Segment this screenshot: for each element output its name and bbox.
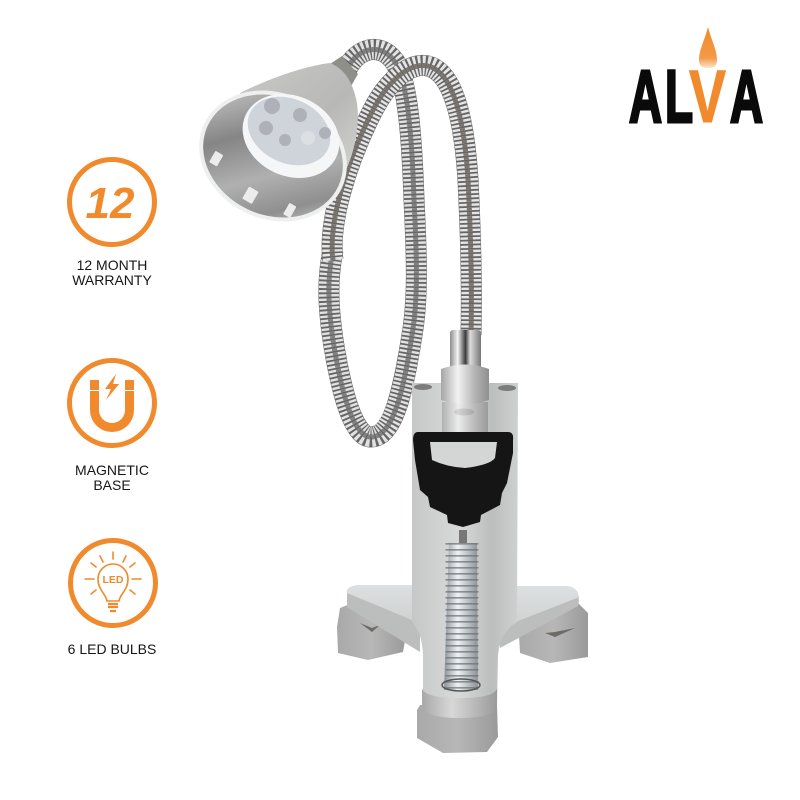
product: gooseneck lamp xyxy=(177,49,588,753)
clamp plate xyxy=(337,383,588,705)
bottom washer xyxy=(422,688,497,718)
logo wordmark: L xyxy=(665,55,693,138)
lamp dome xyxy=(240,63,358,170)
main plate xyxy=(412,383,518,705)
lamp rim xyxy=(177,67,369,245)
badge: 12 month warranty: WARRANTY xyxy=(72,272,152,288)
right wing xyxy=(500,586,579,648)
lamp head xyxy=(177,56,369,245)
icon: horseshoe magnet xyxy=(90,374,134,432)
badge: 12 month warranty: 12 MONTH xyxy=(77,257,147,273)
left wing xyxy=(347,585,420,652)
lens with LEDs xyxy=(229,79,353,193)
badge: magnetic base xyxy=(70,360,154,493)
badge: 12 month warranty: 12 xyxy=(86,179,135,228)
LED bulbs xyxy=(259,98,331,146)
mounting screws xyxy=(414,384,516,416)
right foot nut xyxy=(519,600,588,663)
icon: logo flame xyxy=(699,27,717,68)
badge: magnetic base: MAGNETIC xyxy=(75,462,149,478)
black clamp knob xyxy=(413,432,513,527)
badge: 12 month warranty xyxy=(70,160,154,288)
logo wordmark: A xyxy=(730,55,763,138)
bottom hex nut xyxy=(417,705,498,753)
badge: 6 LED bulbs: 6 LED BULBS xyxy=(68,641,156,657)
lamp inner reflector xyxy=(183,72,363,240)
LED slots xyxy=(209,151,296,218)
lamp neck xyxy=(330,56,358,88)
threaded screw xyxy=(442,530,480,691)
logo wordmark: A xyxy=(629,55,662,138)
logo wordmark: V xyxy=(689,55,726,138)
left foot nut xyxy=(337,600,406,660)
logo: ALVA xyxy=(629,27,763,138)
gooseneck hose: front run xyxy=(332,65,471,335)
icon: LED light bulb: LED xyxy=(102,574,124,586)
logo wordmark xyxy=(629,55,763,138)
badge: magnetic base: BASE xyxy=(93,477,131,493)
gooseneck hose: rear run xyxy=(329,49,416,437)
badge: 6 LED bulbs xyxy=(68,540,156,657)
post ferrule and collar xyxy=(441,330,489,432)
